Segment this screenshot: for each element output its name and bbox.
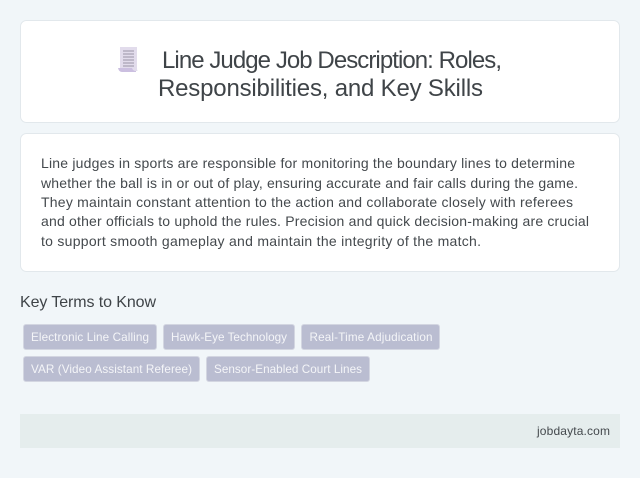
heading: key terms: Key Terms to Know bbox=[20, 294, 156, 311]
description text: to support smooth gameplay and maintain the integrity of the match. bbox=[41, 233, 481, 249]
title text: Line Judge Job Description: Roles, bbox=[162, 47, 502, 74]
title text: Responsibilities, and Key Skills bbox=[158, 75, 483, 102]
tag: real-time adjudication bbox=[302, 324, 440, 350]
description text: They maintain constant attention to the action and collaborate closely with referees bbox=[41, 194, 573, 210]
tag: electronic line calling bbox=[24, 324, 156, 350]
tag list bbox=[24, 324, 440, 382]
footer source text: jobdayta.com bbox=[536, 424, 610, 438]
footer bar bbox=[20, 414, 620, 448]
icon: document scroll bbox=[118, 47, 138, 72]
panel: description bbox=[20, 134, 620, 272]
tag: var: VAR (Video Assistant Referee) bbox=[31, 363, 192, 376]
description text: Line judges in sports are responsible for monitoring the boundary lines to determine bbox=[41, 155, 575, 171]
tag: sensor-enabled court lines bbox=[206, 356, 370, 382]
title text bbox=[158, 47, 502, 102]
panel: title bbox=[20, 20, 620, 122]
tag: real-time adjudication: Real-Time Adjudication bbox=[310, 331, 432, 344]
description text: whether the ball is in or out of play, ensuring accurate and fair calls during the game. bbox=[40, 175, 578, 191]
description text: and other officials to uphold the rules. Precision and quick decision-making are crucial bbox=[41, 213, 589, 229]
tag: hawk-eye technology bbox=[164, 324, 294, 350]
tag: var bbox=[24, 356, 200, 382]
tag: electronic line calling: Electronic Line Calling bbox=[31, 331, 149, 344]
tag: hawk-eye technology: Hawk-Eye Technology bbox=[171, 331, 287, 344]
tag: sensor-enabled court lines: Sensor-Enabled Court Lines bbox=[214, 363, 362, 376]
description text bbox=[40, 155, 589, 249]
